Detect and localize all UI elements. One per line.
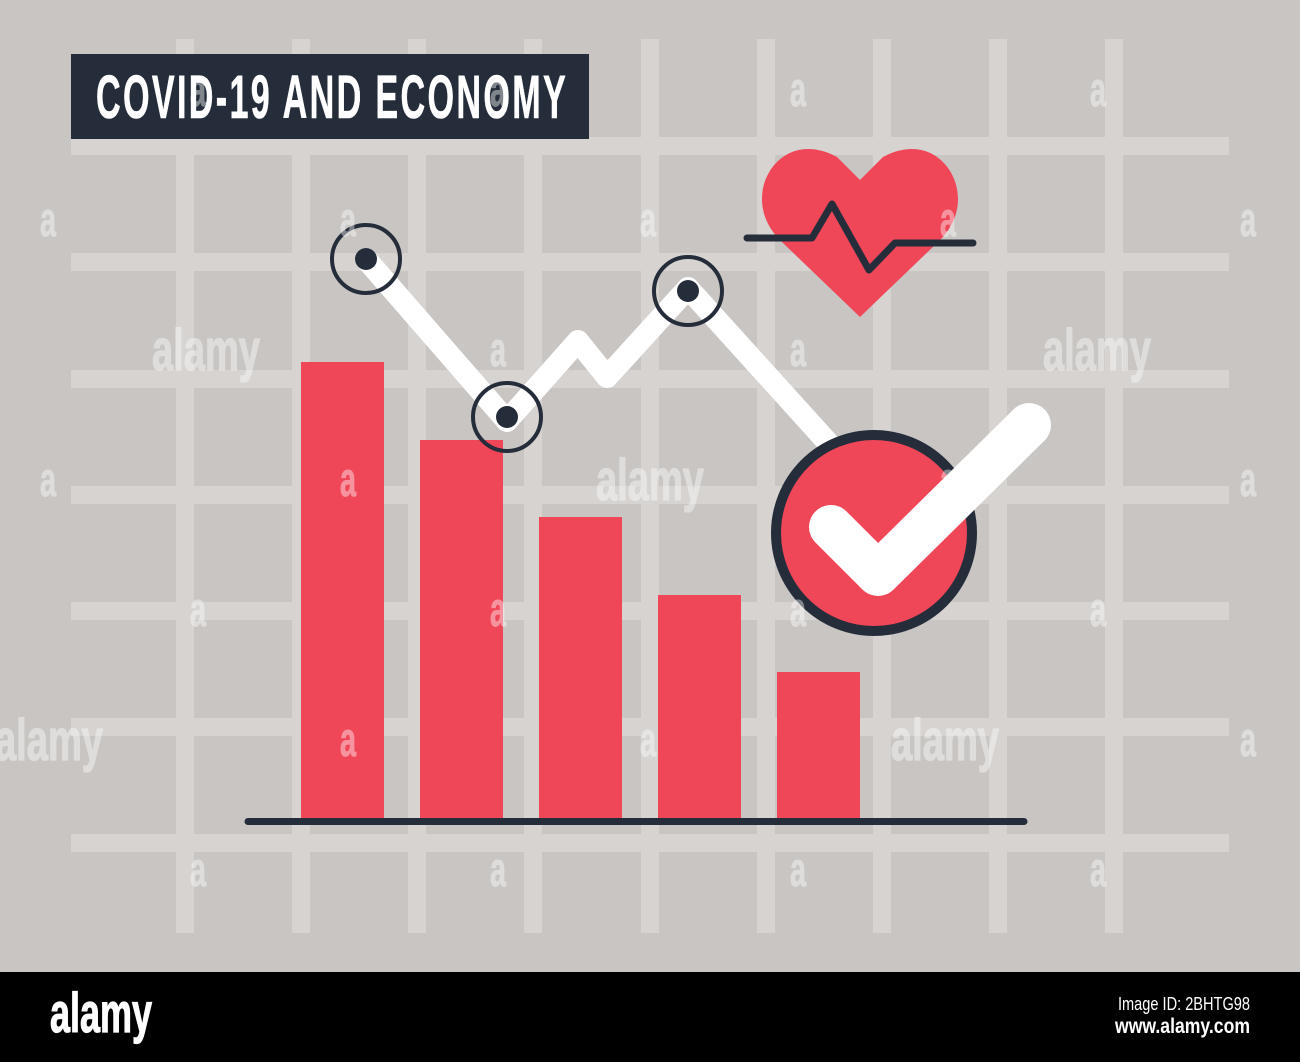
data point 1	[332, 225, 400, 293]
watermark: a	[1090, 64, 1107, 117]
watermark: a	[340, 194, 357, 247]
data point 2	[473, 383, 541, 451]
watermark: a	[490, 844, 507, 897]
bar 3	[539, 517, 622, 819]
watermark: a	[340, 714, 357, 767]
watermark	[0, 64, 1257, 897]
watermark: a	[490, 584, 507, 637]
watermark: a	[1240, 714, 1257, 767]
bar 2	[420, 440, 503, 819]
watermark: a	[790, 844, 807, 897]
watermark: a	[1240, 194, 1257, 247]
bar chart	[248, 362, 1024, 822]
watermark: a	[490, 324, 507, 377]
watermark: a	[1090, 844, 1107, 897]
line chart	[332, 225, 840, 456]
footer logo: alamy	[50, 981, 152, 1044]
watermark: a	[490, 64, 507, 117]
bar 5	[777, 672, 860, 819]
watermark: a	[40, 194, 57, 247]
watermark: a	[40, 454, 57, 507]
image id: Image ID: 2BHTG98	[1118, 994, 1250, 1014]
website: www.alamy.com	[1114, 1015, 1250, 1038]
watermark: a	[1090, 584, 1107, 637]
watermark: alamy	[596, 448, 704, 513]
watermark: alamy	[891, 708, 999, 773]
title: COVID-19 AND ECONOMY	[96, 64, 566, 132]
watermark: a	[940, 454, 957, 507]
watermark: a	[790, 64, 807, 117]
watermark: a	[640, 714, 657, 767]
watermark: a	[190, 844, 207, 897]
watermark: a	[1240, 454, 1257, 507]
watermark: alamy	[152, 318, 260, 383]
bar 1	[301, 362, 384, 819]
watermark: a	[190, 584, 207, 637]
watermark: a	[790, 584, 807, 637]
watermark: a	[190, 64, 207, 117]
watermark: a	[340, 454, 357, 507]
icon: check mark badge	[776, 425, 1029, 631]
chart baseline	[248, 818, 1024, 825]
icon: heart with pulse line	[747, 149, 973, 317]
footer bar	[0, 972, 1300, 1062]
watermark: a	[790, 324, 807, 377]
watermark: a	[640, 194, 657, 247]
bar 4	[658, 595, 741, 819]
data point 3	[654, 257, 722, 325]
watermark: a	[940, 194, 957, 247]
watermark: alamy	[1043, 318, 1151, 383]
